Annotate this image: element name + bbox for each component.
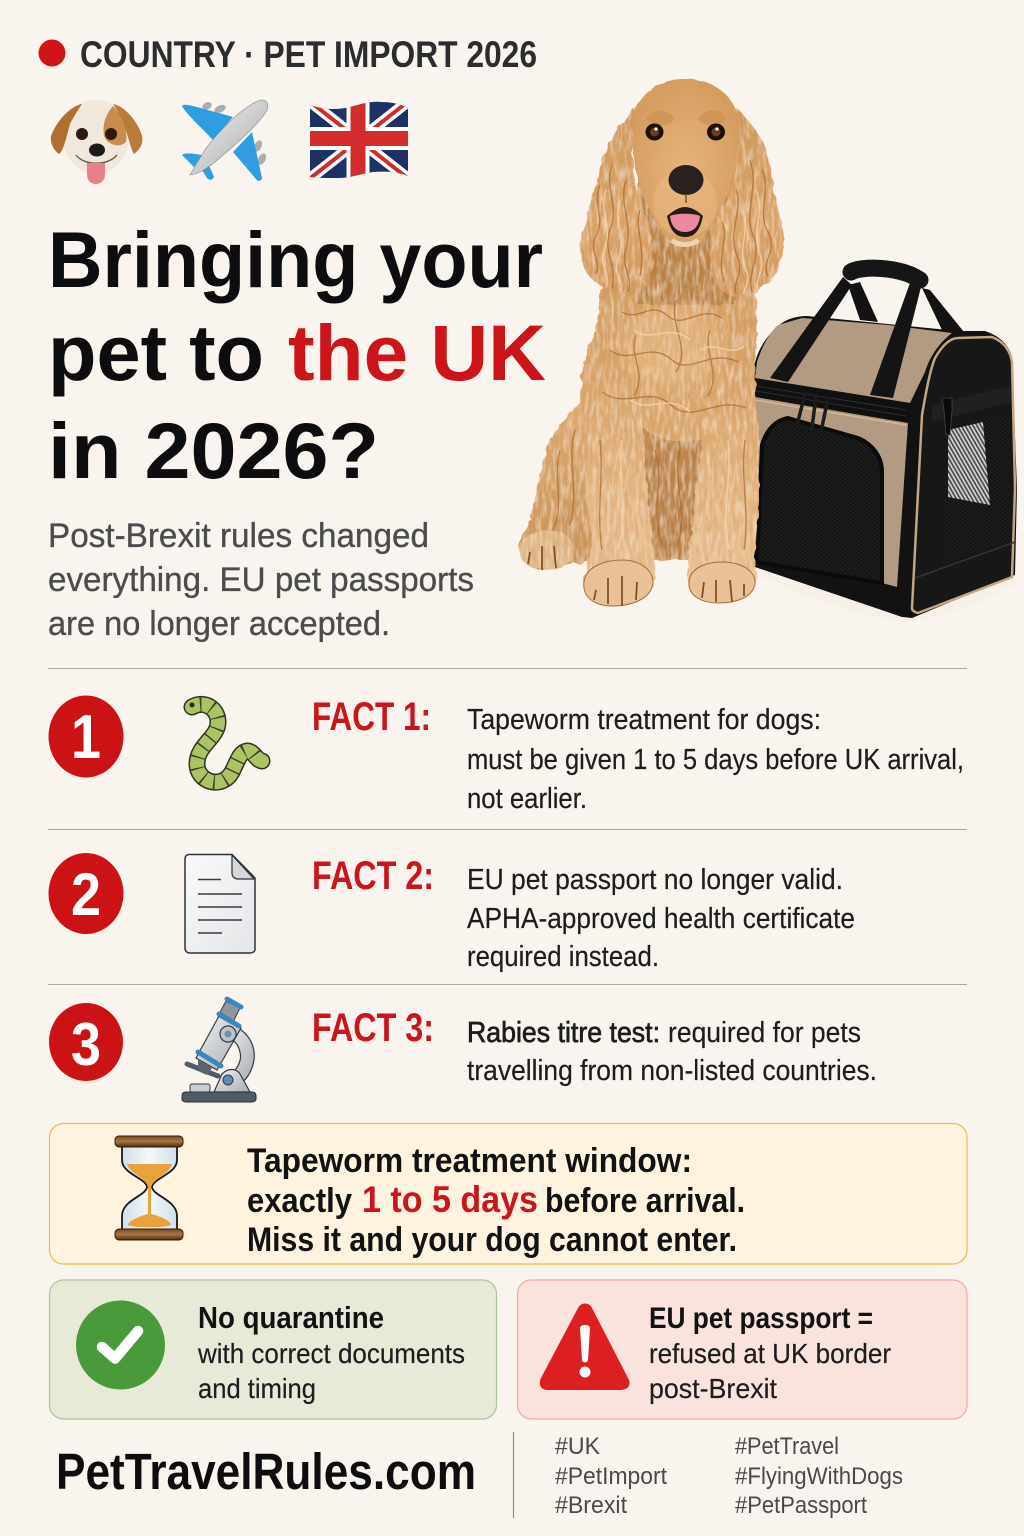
icon: warning triangle — [540, 1304, 630, 1390]
callout text — [247, 1142, 745, 1259]
title: the UK — [288, 308, 546, 397]
eyes — [646, 124, 664, 140]
panel: EU passport warning — [518, 1280, 967, 1419]
back straps — [848, 282, 964, 332]
fact 2 text — [467, 864, 855, 973]
no quarantine text: with correct documents — [197, 1338, 465, 1369]
fact 2 text: APHA-approved health certificate — [467, 903, 855, 935]
left ear — [580, 108, 653, 295]
fact 3 text: required for pets — [668, 1017, 861, 1049]
forehead groove — [684, 100, 686, 160]
fact 3 number badge — [49, 1003, 123, 1081]
icon: airplane — [182, 100, 268, 181]
left front leg — [584, 390, 655, 605]
fact 3 text: Rabies titre test: — [467, 1017, 660, 1049]
brow shading — [646, 110, 726, 126]
callout text: before arrival. — [545, 1182, 745, 1220]
footer divider — [512, 1432, 514, 1518]
panel: no quarantine — [50, 1280, 496, 1419]
fact 3 number badge: 3 — [71, 1011, 101, 1078]
hashtags: #Brexit — [555, 1492, 627, 1519]
no quarantine text: No quarantine — [198, 1300, 384, 1335]
fact 2 — [48, 853, 855, 973]
icon: microscope — [182, 999, 256, 1102]
hashtags — [555, 1433, 903, 1519]
icon: UK flag — [310, 102, 408, 178]
fact 2 text: required instead. — [467, 941, 659, 973]
warning text: post-Brexit — [649, 1373, 777, 1404]
right front leg — [688, 400, 759, 601]
title — [48, 215, 546, 495]
illustration: golden spaniel — [518, 79, 783, 606]
hashtags: #PetImport — [555, 1463, 667, 1490]
fact 1 text: Tapeworm treatment for dogs: — [467, 704, 821, 736]
fact 1 text: must be given 1 to 5 days before UK arrival, — [467, 744, 964, 776]
callout text: Miss it and your dog cannot enter. — [247, 1221, 737, 1259]
fact 2 number badge — [48, 853, 124, 934]
fact 2 number badge: 2 — [71, 861, 101, 928]
fact 1 — [48, 695, 964, 815]
fact 1 number badge: 1 — [71, 703, 101, 772]
panel: treatment window callout — [50, 1124, 967, 1264]
fact 1 text — [467, 704, 964, 815]
zip pulls — [797, 394, 828, 432]
carrier bag — [752, 268, 1018, 622]
bag main — [752, 316, 1017, 618]
icon: green check — [76, 1300, 165, 1390]
no quarantine text: and timing — [198, 1373, 316, 1404]
subtitle: are no longer accepted. — [48, 605, 390, 643]
mouth — [667, 207, 703, 237]
right ear — [710, 108, 783, 297]
side trim — [912, 337, 1015, 613]
front mesh pocket — [757, 418, 882, 583]
title: Bringing your — [48, 215, 543, 304]
callout text: 1 to 5 days — [362, 1179, 538, 1220]
header tag: COUNTRY · PET IMPORT 2026 — [80, 34, 537, 75]
straps — [770, 277, 852, 382]
back paw — [519, 531, 574, 569]
fact 3 — [49, 999, 877, 1102]
chest highlight — [622, 305, 722, 385]
icon: hourglass — [115, 1136, 183, 1240]
hashtags: #PetPassport — [735, 1492, 867, 1519]
hashtags: #PetTravel — [735, 1433, 839, 1460]
fact 1 heading: FACT 1: — [312, 695, 431, 739]
fact 3 text — [467, 1017, 877, 1087]
fact 1 number badge — [48, 696, 124, 778]
warning text — [649, 1302, 891, 1404]
website name: PetTravelRules.com — [56, 1443, 476, 1500]
under-chin shadow — [638, 130, 736, 305]
fact 2 text: EU pet passport no longer valid. — [467, 864, 843, 896]
warning text: refused at UK border — [649, 1338, 891, 1369]
callout text: Tapeworm treatment window: — [247, 1142, 692, 1180]
top tan panel — [755, 318, 952, 403]
icon: worm — [190, 702, 262, 782]
head — [632, 79, 740, 245]
title: in 2026? — [48, 406, 379, 495]
subtitle: Post-Brexit rules changed — [48, 517, 429, 555]
fact 3 text: travelling from non-listed countries. — [467, 1055, 877, 1087]
side pocket band and mesh — [932, 386, 1011, 422]
subtitle: everything. EU pet passports — [48, 561, 474, 599]
hashtags: #UK — [555, 1433, 600, 1460]
subtitle — [48, 517, 474, 643]
fact 3 heading: FACT 3: — [312, 1006, 434, 1050]
dividers — [48, 668, 967, 984]
muzzle — [653, 169, 717, 237]
no quarantine text — [197, 1300, 465, 1404]
haunch and torso — [518, 280, 759, 570]
fact 1 text: not earlier. — [467, 783, 587, 815]
icon: dog emoji — [51, 100, 142, 184]
title: pet to — [48, 308, 264, 397]
zip band — [752, 378, 910, 422]
hashtags: #FlyingWithDogs — [735, 1463, 903, 1490]
warning text: EU pet passport = — [649, 1302, 873, 1335]
fact 2 heading: FACT 2: — [312, 854, 434, 898]
lower tan panel — [752, 397, 908, 587]
icon: document — [185, 854, 255, 953]
nose — [668, 165, 704, 195]
belly shadow between legs — [642, 427, 702, 558]
curls — [552, 160, 771, 550]
callout text: exactly — [247, 1182, 352, 1220]
paws — [584, 560, 755, 606]
